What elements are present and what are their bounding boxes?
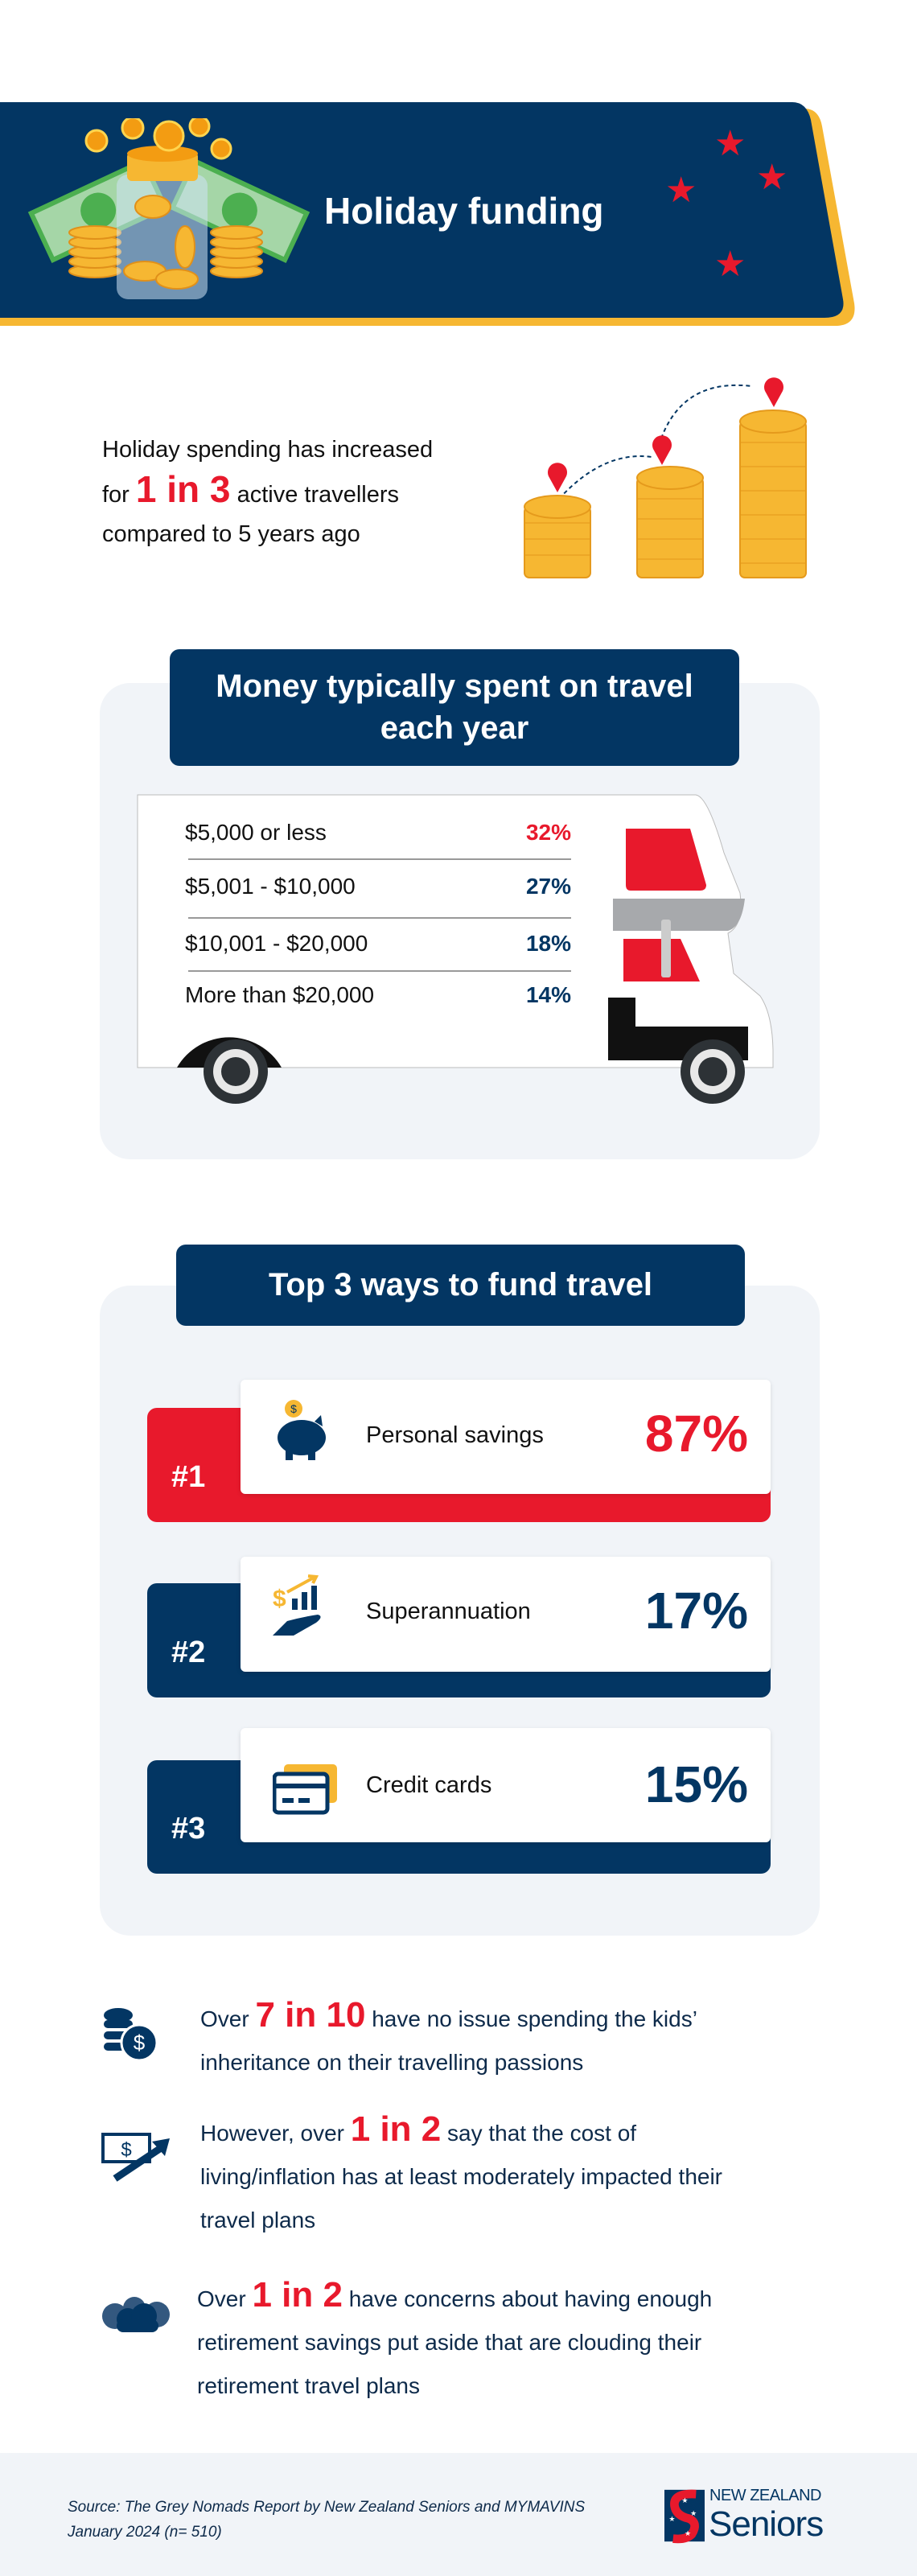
card: #2 superannuation: 17%	[645, 1582, 748, 1640]
heading: top 3 ways	[176, 1245, 745, 1326]
stat: 1 in 2 cost of living: However, over 1 in 2 say that the cost of	[200, 2109, 636, 2149]
icon: money arrow	[101, 2133, 170, 2182]
row: $5,000 or less: $5,000 or less	[185, 820, 327, 845]
icon: piggy bank: $	[290, 1402, 297, 1415]
row: more than $20,000: 14%	[526, 982, 571, 1007]
card: #1 personal savings: 87%	[645, 1405, 748, 1463]
row: more than $20,000: More than $20,000	[185, 982, 374, 1007]
row: $10,001-$20,000	[185, 931, 571, 956]
stat: 1 in 2 retirement savings	[102, 2275, 712, 2398]
logo: New Zealand Seniors: ★	[690, 2509, 697, 2517]
card: #3 credit cards	[147, 1728, 772, 1874]
source text	[68, 2499, 585, 2541]
icon: coins dollar	[104, 2008, 156, 2060]
heading: money spent	[170, 649, 739, 766]
stat: 1 in 2 retirement savings: retirement savings put aside that are clouding their	[197, 2330, 701, 2355]
row: $5,001-$10,000	[185, 874, 571, 899]
logo: New Zealand Seniors: NEW ZEALAND	[709, 2487, 821, 2504]
icon: credit card	[273, 1764, 337, 1815]
logo: New Zealand Seniors: ★	[681, 2496, 688, 2504]
icon: clouds	[102, 2297, 170, 2332]
card: #2 superannuation: Superannuation	[366, 1599, 531, 1624]
logo: New Zealand Seniors: ★	[685, 2529, 691, 2537]
text: 1 in 3 travellers	[102, 437, 433, 547]
row: $10,001-$20,000: $10,001 - $20,000	[185, 931, 368, 956]
icon: superannuation hand	[273, 1574, 321, 1636]
source text: January 2024 (n= 510)	[68, 2524, 222, 2541]
heading: money spent: Money typically spent on travel	[216, 669, 693, 704]
row: $5,001-$10,000: $5,001 - $10,000	[185, 874, 356, 899]
chart: van with spending table	[137, 795, 774, 1104]
panel: top 3 ways	[100, 1286, 820, 1936]
card: #2 superannuation	[147, 1557, 772, 1697]
icon: stars	[665, 124, 787, 284]
icon: piggy bank	[278, 1400, 326, 1460]
panel: money spent	[100, 683, 820, 1159]
footer	[0, 2453, 917, 2576]
card: #3 credit cards: Credit cards	[366, 1772, 491, 1798]
icon: coin stacks	[524, 377, 807, 578]
stat: 1 in 2 cost of living	[101, 2109, 722, 2232]
source text: Source: The Grey Nomads Report by New Zealand Seniors and MYMAVINS	[68, 2499, 585, 2516]
stat: 1 in 2 cost of living: travel plans	[200, 2208, 315, 2232]
icon: superannuation hand: $	[273, 1586, 286, 1612]
card: #2 superannuation: #2	[171, 1636, 205, 1669]
icon: stars: ★	[714, 124, 746, 163]
card: #3 credit cards: #3	[171, 1812, 205, 1846]
card: #1 personal savings	[147, 1380, 772, 1522]
card: #3 credit cards: 15%	[645, 1755, 748, 1813]
text: 1 in 3 travellers: compared to 5 years ago	[102, 521, 360, 547]
text: 1 in 3 travellers: for 1 in 3 active travellers	[102, 468, 399, 510]
logo: New Zealand Seniors: ★	[668, 2515, 675, 2523]
stat: 1 in 2 retirement savings: Over 1 in 2 have concerns about having enough	[197, 2275, 712, 2315]
stat: 7 in 10 inheritance: Over 7 in 10 have no issue spending the kids’	[200, 1995, 697, 2035]
icon: money arrow: $	[121, 2139, 132, 2161]
row: $5,000 or less: 32%	[526, 820, 571, 845]
heading: money spent: each year	[380, 710, 528, 746]
banner	[0, 102, 854, 326]
stat: 7 in 10 inheritance	[104, 1995, 697, 2075]
stat: 7 in 10 inheritance: inheritance on their travelling passions	[200, 2050, 583, 2075]
stat: 1 in 2 cost of living: living/inflation has at least moderately impacted their	[200, 2164, 722, 2189]
logo: New Zealand Seniors	[664, 2487, 823, 2544]
icon: coins dollar: $	[134, 2031, 146, 2055]
title: Holiday funding	[324, 190, 604, 232]
icon: stars: ★	[714, 245, 746, 284]
icon: stars: ★	[665, 171, 697, 210]
stat: 1 in 2 retirement savings: retirement travel plans	[197, 2373, 420, 2398]
icon: money jar	[27, 118, 310, 299]
row: $10,001-$20,000: 18%	[526, 931, 571, 956]
card: #1 personal savings: #1	[171, 1460, 205, 1494]
icon: stars: ★	[756, 158, 787, 197]
row: more than $20,000	[185, 982, 571, 1007]
row: $5,001-$10,000: 27%	[526, 874, 571, 899]
logo: New Zealand Seniors: Seniors	[709, 2504, 823, 2544]
card: #1 personal savings: Personal savings	[366, 1422, 544, 1448]
heading: top 3 ways: Top 3 ways to fund travel	[269, 1267, 652, 1302]
text: 1 in 3 travellers: Holiday spending has increased	[102, 437, 433, 463]
row: $5,000 or less	[185, 820, 571, 845]
